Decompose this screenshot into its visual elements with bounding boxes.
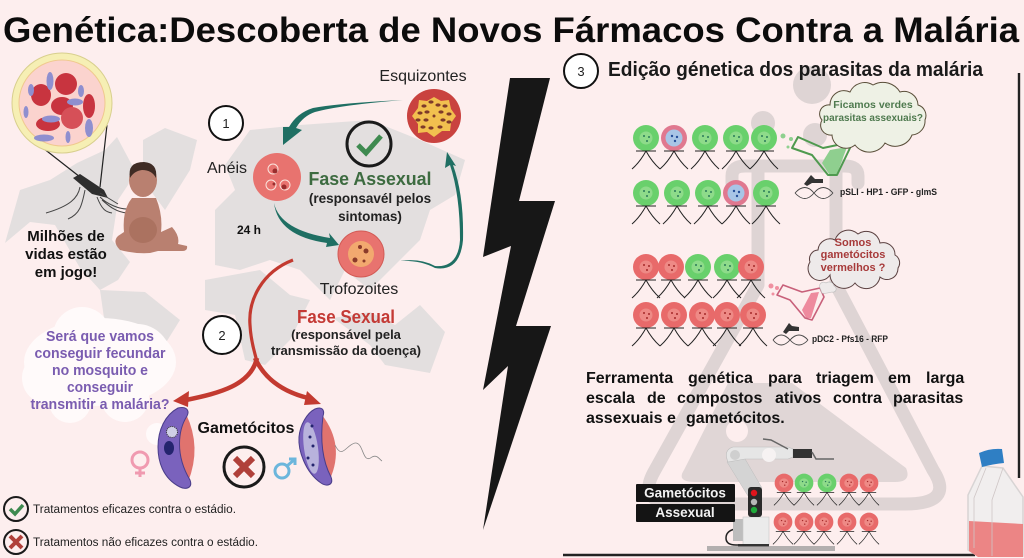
icon: male symbol bbox=[275, 459, 295, 478]
text: asexual phase bbox=[308, 169, 432, 224]
text: genetic tool: em bbox=[888, 370, 911, 387]
construct label: pDC2 bbox=[773, 323, 889, 345]
text: thought cloud question: Será que vamos bbox=[46, 328, 154, 345]
text: sexual phase: (responsável pela bbox=[291, 327, 402, 342]
icon: check circle bbox=[347, 122, 391, 166]
text: genetic tool: parasitas bbox=[893, 390, 963, 407]
cell: trophozoite bbox=[338, 231, 384, 277]
speech bubble: green: parasitas assexuais? bbox=[823, 112, 923, 124]
robot arm bbox=[707, 439, 835, 551]
label: Trofozoites: Trofozoites bbox=[320, 281, 398, 298]
text: sexual phase: Fase Sexual bbox=[297, 307, 395, 327]
number 1: 1 bbox=[222, 116, 230, 131]
label box: Gametócitos bbox=[636, 484, 735, 502]
text: genetic tool: contra bbox=[833, 390, 882, 407]
parasites row 2 bbox=[632, 180, 780, 224]
speech bubble: green: Ficamos verdes bbox=[833, 99, 913, 111]
text: genetic tool: Ferramenta bbox=[586, 370, 673, 387]
icon: X circle bbox=[224, 447, 264, 487]
text: thought cloud question: conseguir bbox=[67, 379, 133, 396]
female gametocyte bbox=[158, 407, 195, 488]
text: genetic tool: escala bbox=[586, 390, 635, 407]
male gametocyte bbox=[299, 408, 382, 485]
construct label: pDC2: pDC2 - Pfs16 - RFP bbox=[812, 334, 889, 345]
icon: female symbol bbox=[132, 452, 148, 477]
number 2 bbox=[203, 316, 241, 354]
legend: not effective: Tratamentos não eficazes contra o estádio. bbox=[33, 537, 258, 549]
label: Esquizontes: Esquizontes bbox=[379, 68, 467, 85]
label box: Assexual bbox=[636, 504, 735, 522]
cell: schizont bbox=[407, 89, 461, 143]
text: genetic tool: assexuais bbox=[586, 410, 663, 427]
text: thought cloud question bbox=[30, 328, 170, 413]
heading: genetic editing: Edição génetica dos parasitas da malária bbox=[608, 59, 984, 81]
text: sexual phase: transmissão da doença) bbox=[271, 343, 421, 358]
construct label: pSLI bbox=[795, 175, 937, 198]
number 1 bbox=[209, 106, 243, 140]
speech bubble: red: Somos bbox=[835, 237, 871, 249]
background flask bbox=[649, 66, 940, 504]
inset: infected blood cells bbox=[12, 53, 112, 187]
text: thought cloud question: conseguir fecundar bbox=[34, 345, 166, 362]
text: asexual phase: (responsavél pelos bbox=[309, 191, 431, 206]
title: Genética:Descoberta de Novos Fármacos Contra a Malária bbox=[3, 11, 1020, 50]
text: asexual phase: Fase Assexual bbox=[308, 169, 432, 189]
icon: baby bbox=[115, 162, 187, 253]
icon: mosquito bbox=[46, 174, 127, 219]
text: genetic tool: triagem bbox=[816, 370, 874, 387]
speech bubble: red: vermelhos ? bbox=[821, 262, 886, 274]
arrows: asexual cycle bbox=[274, 100, 463, 268]
text: lives at stake: vidas estão bbox=[25, 246, 107, 263]
text: thought cloud question: transmitir a malária? bbox=[30, 396, 170, 413]
thought cloud bbox=[22, 307, 176, 445]
construct label: pSLI: pSLI - HP1 - GFP - glmS bbox=[840, 187, 937, 198]
speech bubble: red bbox=[808, 230, 900, 289]
parasites row 5 bbox=[774, 474, 879, 505]
lightning bolt bbox=[483, 78, 555, 530]
world map background bbox=[5, 120, 465, 400]
speech bubble: red: gametócitos bbox=[821, 249, 885, 261]
text: thought cloud question: no mosquito e bbox=[52, 362, 148, 379]
label box: Gametócitos: Gametócitos bbox=[644, 486, 726, 500]
text: genetic tool: gametócitos. bbox=[686, 410, 785, 427]
culture flask bbox=[968, 449, 1023, 557]
text: genetic tool: de bbox=[647, 390, 666, 407]
text: genetic tool: larga bbox=[926, 370, 964, 387]
legend: effective: Tratamentos eficazes contra o estádio. bbox=[33, 504, 236, 516]
text: lives at stake: Milhões de bbox=[27, 228, 105, 245]
legend: not effective bbox=[4, 530, 258, 554]
label: 24 h: 24 h bbox=[237, 223, 261, 237]
green flask bbox=[780, 134, 850, 175]
cell: rings bbox=[253, 153, 301, 201]
parasites row 3 bbox=[632, 254, 765, 298]
text: lives at stake bbox=[25, 228, 107, 281]
number 3 bbox=[564, 54, 598, 88]
text: genetic tool: genética bbox=[688, 370, 753, 387]
text: genetic tool: compostos bbox=[677, 390, 762, 407]
text: genetic tool: e bbox=[667, 410, 676, 427]
parasites row 6 bbox=[773, 513, 879, 544]
text: genetic tool: ativos bbox=[775, 390, 821, 407]
label: Gametócitos: Gametócitos bbox=[198, 420, 295, 437]
parasites row 4 bbox=[632, 302, 767, 346]
parasites row 1 bbox=[632, 125, 778, 169]
label box: Assexual: Assexual bbox=[655, 505, 715, 520]
legend: effective bbox=[4, 497, 236, 521]
number 3: 3 bbox=[577, 64, 585, 79]
text: genetic tool: para bbox=[768, 370, 802, 387]
speech bubble: green bbox=[820, 82, 926, 152]
text: asexual phase: sintomas) bbox=[338, 209, 402, 224]
red flask bbox=[768, 282, 836, 320]
text: lives at stake: em jogo! bbox=[35, 264, 97, 281]
panel frame lines bbox=[563, 73, 1019, 555]
arrow: sexual branch bbox=[173, 260, 321, 407]
number 2: 2 bbox=[218, 328, 226, 343]
text: sexual phase bbox=[271, 307, 421, 358]
label: Anéis: Anéis bbox=[207, 160, 247, 177]
